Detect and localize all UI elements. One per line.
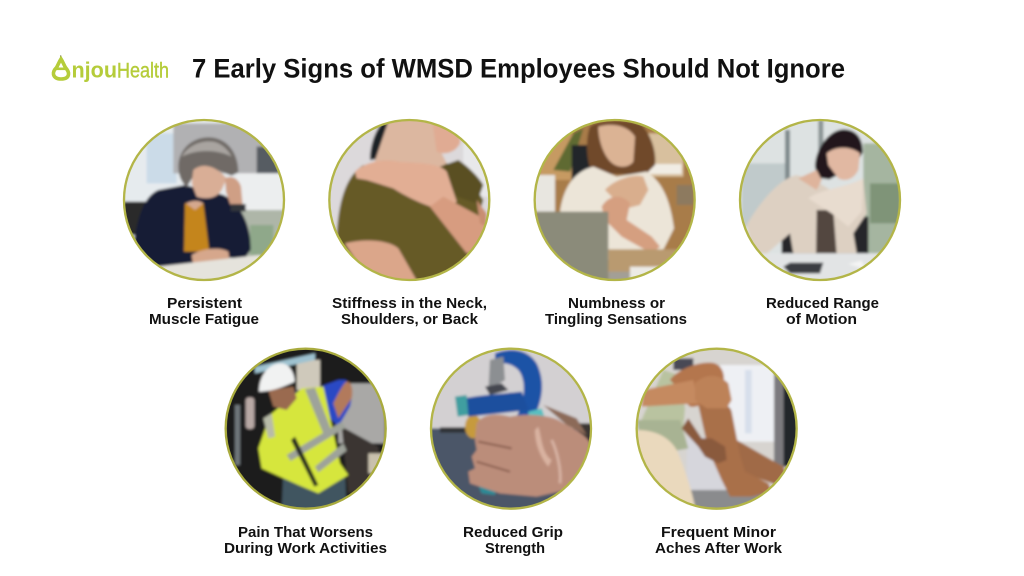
logo: AnjouHealth: njou	[72, 58, 117, 82]
label: Muscle Fatigue	[149, 311, 259, 328]
label: Persistent	[167, 295, 242, 312]
label: Tingling Sensations	[545, 311, 687, 328]
panel: reduced range of motion	[738, 117, 905, 328]
panel: frequent minor aches	[635, 347, 798, 557]
label: Stiffness in the Neck,	[332, 295, 487, 312]
panel: numbness or tingling	[533, 117, 697, 328]
label: Reduced Range	[766, 295, 879, 312]
label	[149, 295, 259, 328]
label: Pain That Worsens	[238, 524, 373, 541]
panel: reduced grip strength	[430, 347, 593, 557]
label: Shoulders, or Back	[341, 311, 479, 328]
label	[463, 524, 563, 557]
label	[655, 524, 783, 557]
label	[545, 295, 687, 328]
label: of Motion	[786, 311, 857, 328]
photo: hand on shoulder	[328, 118, 490, 282]
label: Strength	[485, 540, 545, 557]
logo: AnjouHealth: Health	[117, 58, 169, 82]
panel: pain during work	[224, 347, 388, 557]
title: 7 Early Signs of WMSD Employees Should Not Ignore	[192, 54, 845, 84]
photo: person holding calf on sofa	[635, 347, 798, 510]
photo: woman in beige blazer holding shoulder	[738, 117, 905, 290]
photo: construction worker holding back	[225, 347, 388, 510]
label: Aches After Work	[655, 540, 783, 557]
label	[332, 295, 487, 328]
label	[224, 524, 387, 557]
photo: tired woman in navy blazer	[120, 117, 290, 287]
label: During Work Activities	[224, 540, 387, 557]
logo: AnjouHealth	[53, 56, 169, 82]
panel: neck and shoulder stiffness	[327, 117, 493, 328]
label: Numbness or	[568, 295, 665, 312]
panel: persistent muscle fatigue	[120, 117, 290, 328]
photo: hand squeezing blue grip trainer	[430, 347, 593, 512]
label: Frequent Minor	[661, 524, 776, 541]
photo: woman holding wrist at laptop	[533, 117, 697, 288]
label	[766, 295, 879, 328]
label: Reduced Grip	[463, 524, 563, 541]
